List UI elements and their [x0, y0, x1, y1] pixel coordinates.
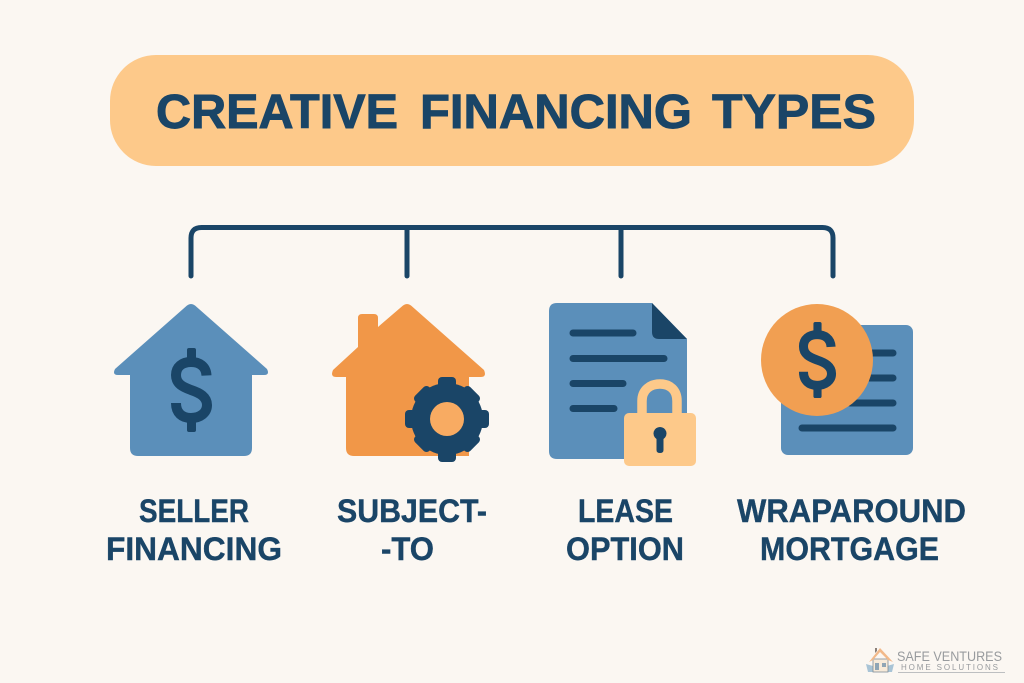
title: CREATIVE: [156, 85, 398, 139]
label: seller financing: SELLER: [139, 493, 249, 529]
label: wraparound mortgage: MORTGAGE: [760, 531, 939, 567]
title: TYPES: [712, 85, 876, 139]
icon: padlock: [624, 384, 696, 466]
title: [156, 85, 876, 139]
icon: gear: [405, 377, 489, 462]
icon: house with dollar sign: [114, 304, 268, 456]
label: lease option: LEASE: [578, 493, 673, 529]
label: wraparound mortgage: WRAPAROUND: [737, 493, 966, 529]
logo wordmark: SAFE VENTURES: [897, 648, 1002, 664]
document folded corner: [652, 303, 687, 339]
icon: house with gear: [332, 304, 489, 462]
logo tagline: HOME SOLUTIONS: [901, 663, 998, 672]
title banner: [110, 55, 914, 166]
icon: document with dollar coin: [761, 304, 913, 455]
label: subject-to: SUBJECT-: [337, 493, 487, 529]
icon: logo house: [866, 648, 894, 672]
connector bracket: [191, 228, 833, 276]
label: wraparound mortgage: [737, 493, 966, 567]
label: subject-to: -TO: [381, 531, 434, 567]
logo: safe ventures home solutions: [866, 648, 1005, 672]
icon: dollar sign: [803, 322, 832, 398]
document text lines: [802, 353, 893, 428]
label: subject-to: [337, 493, 487, 567]
document text lines: [573, 333, 664, 408]
icon: dollar sign: [176, 348, 207, 432]
label: seller financing: FINANCING: [106, 531, 282, 567]
title: FINANCING: [420, 85, 692, 139]
icon: document with padlock: [549, 303, 696, 466]
label: lease option: [566, 493, 684, 567]
label: seller financing: [106, 493, 282, 567]
label: lease option: OPTION: [566, 531, 684, 567]
icon: coin: [761, 304, 873, 416]
